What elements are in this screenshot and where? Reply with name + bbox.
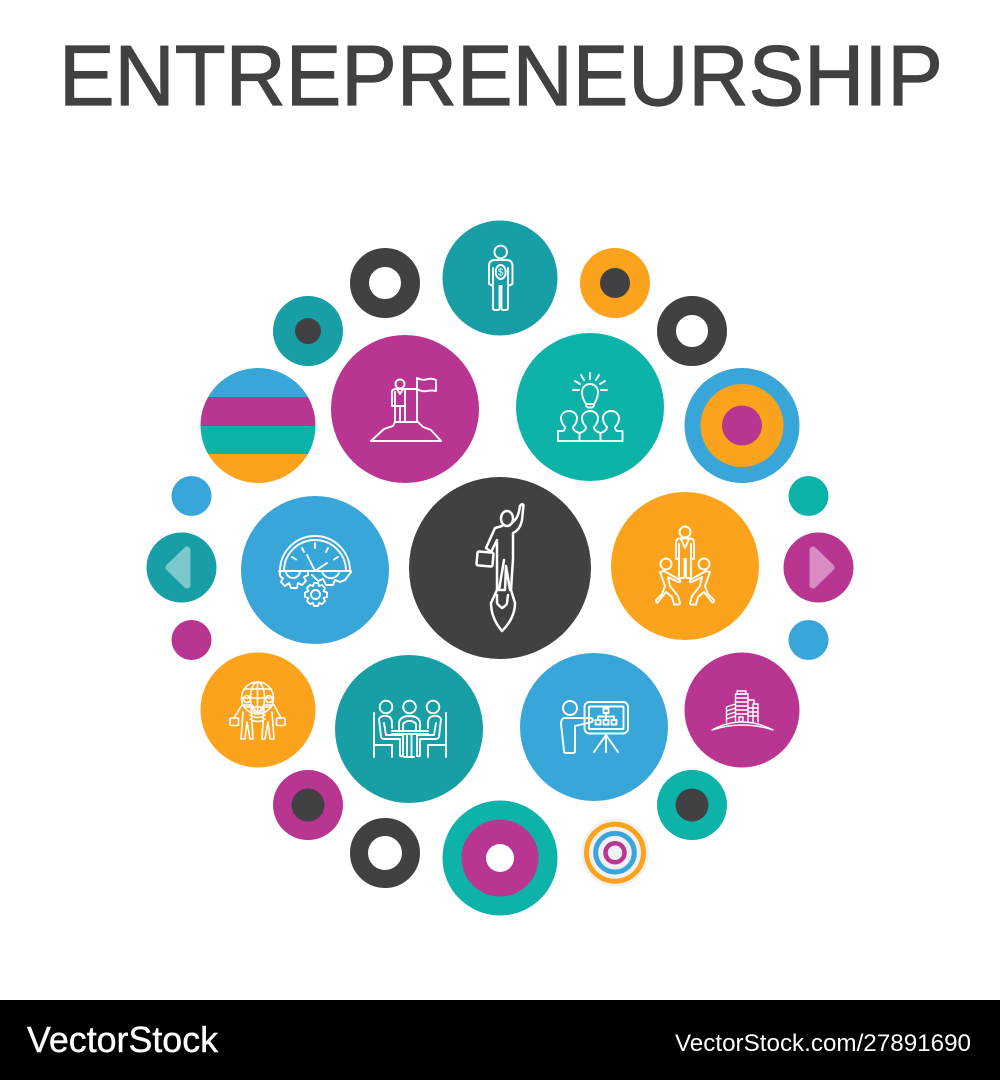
circle: buildings	[684, 652, 800, 768]
circle: meeting	[335, 655, 483, 803]
dot: teal with dark center	[273, 296, 343, 366]
icon: gauge and gears	[279, 536, 351, 606]
icon: people lifting leader	[656, 526, 714, 605]
footer bar	[0, 1000, 1000, 1080]
circle: concentric blue orange magenta	[684, 368, 800, 483]
ring: dark bottom left	[359, 827, 411, 879]
icon: people and globe	[230, 682, 285, 739]
dot: orange with dark center	[580, 248, 650, 318]
arrow button: right	[784, 532, 854, 602]
dot: small magenta left	[172, 620, 212, 660]
circle: stripes	[200, 368, 316, 484]
target rings	[581, 819, 649, 887]
arrow button: left	[146, 532, 216, 602]
circle: speedometer gears	[241, 496, 389, 644]
icon: three people at table	[374, 701, 446, 757]
dot: teal with dark center bottom	[657, 770, 727, 840]
dot: small teal right	[788, 476, 828, 516]
circle: presentation	[520, 653, 668, 801]
icon: office buildings on hill	[712, 691, 773, 730]
circle: idea team	[516, 333, 664, 481]
dot: small blue left	[172, 476, 212, 516]
circle: global business partners	[200, 652, 316, 768]
icon: person riding rocket	[476, 504, 524, 631]
footer logo text: VectorStock	[27, 1019, 219, 1060]
icon: presenter with org chart board	[561, 701, 628, 753]
icon: person with flag on summit	[371, 378, 441, 441]
circle: goal flag	[331, 335, 479, 483]
icon: bulb over people	[558, 373, 622, 441]
circle: team lifting leader	[611, 492, 759, 640]
circle: dollar person	[442, 220, 558, 336]
circle: bottom concentric	[442, 800, 558, 916]
dot: magenta with dark center	[273, 770, 343, 840]
title: ENTREPRENEURSHIP	[59, 29, 943, 124]
ring: dark top right	[666, 306, 718, 356]
footer url text: VectorStock.com/27891690	[675, 1030, 971, 1057]
icon: person with dollar: $	[498, 268, 504, 278]
dot: small blue right	[788, 620, 828, 660]
ring: dark top left	[360, 258, 410, 308]
panel: center circle with rocket person	[409, 477, 591, 659]
